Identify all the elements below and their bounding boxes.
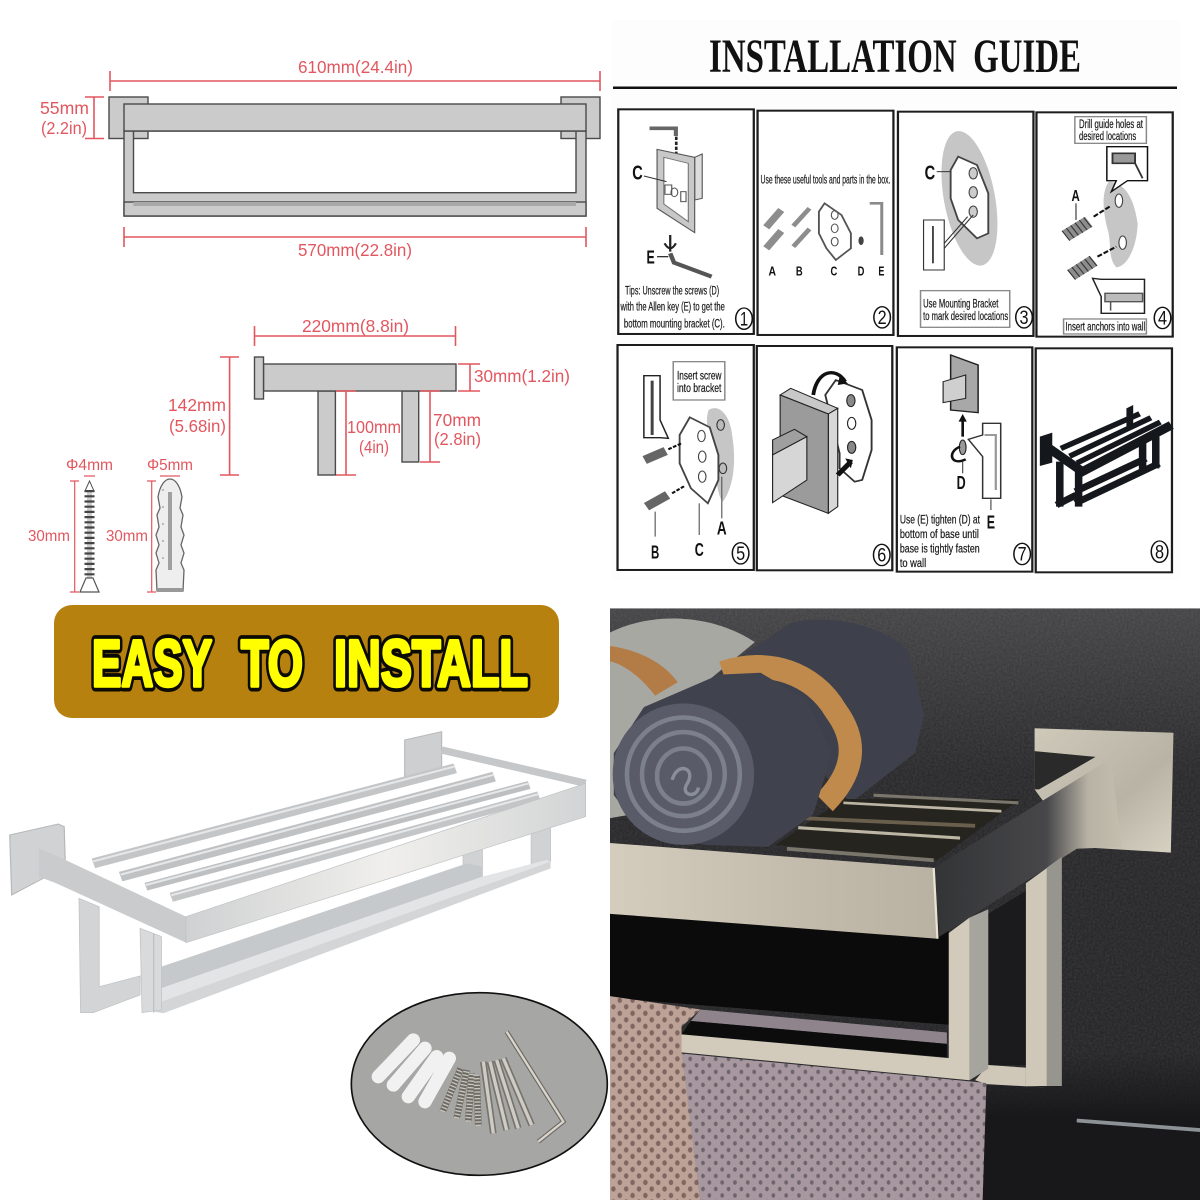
step 2: 2 [878, 307, 887, 329]
step 5: 5 [736, 543, 745, 565]
dimension: rear leg: 70mm [433, 410, 481, 430]
dark recess under shelf [610, 906, 949, 1025]
step 7: Use (E) tighten (D) at [900, 512, 980, 526]
step 6 [757, 346, 892, 570]
dimension: total height [168, 357, 239, 475]
step 1 [618, 109, 754, 334]
wall anchors [378, 1040, 449, 1102]
banner: easy to install: TO [241, 626, 303, 700]
step 5: into bracket [677, 381, 722, 395]
banner: easy to install [54, 605, 559, 718]
step 3: Use Mounting Bracket [923, 296, 999, 310]
dimension: depth [254, 316, 456, 346]
hanging towels [691, 1009, 947, 1044]
step 2: Use these useful tools and parts in the box. [761, 172, 890, 186]
shelf left side [39, 848, 186, 943]
dimension: plate height [40, 97, 104, 138]
anchor dimensions: Φ5mm [147, 457, 193, 474]
step 4: 4 [1158, 308, 1167, 329]
step 7 [897, 347, 1032, 572]
panel: front view dimensions [40, 57, 600, 260]
step 8: 8 [1155, 541, 1164, 563]
step 4 [1036, 112, 1173, 337]
step 1: C [632, 161, 643, 184]
rolled towel [613, 673, 832, 847]
step 3 [898, 112, 1033, 336]
step 7: bottom of base until [900, 527, 979, 541]
rear wall plate [405, 732, 442, 777]
front leg [140, 928, 161, 1013]
gold towel band [723, 667, 850, 803]
banner: easy to install: EASY [92, 626, 212, 700]
step 3: to mark desired locations [923, 309, 1008, 323]
dimension: total height: (5.68in) [169, 416, 226, 436]
step 3: 3 [1020, 307, 1029, 329]
left wall plate [10, 824, 65, 895]
step 1: Tips: Unscrew the screws (D) [625, 283, 719, 297]
dimension: overall width: 610mm(24.4in) [298, 57, 413, 77]
step 7: D [957, 473, 966, 494]
step 7: E [987, 512, 995, 533]
shelf opening [39, 750, 586, 917]
allen key [507, 1032, 563, 1142]
towel bar recess [682, 1021, 947, 1057]
guide steps row one [618, 109, 1173, 337]
anchor drawing [156, 479, 184, 592]
guide steps row two [618, 345, 1172, 572]
machine screws [483, 1058, 532, 1133]
step 2: C [831, 264, 837, 279]
step 1: bottom mounting bracket (C). [624, 316, 725, 330]
dimension: bar width [124, 227, 586, 260]
step 8 [1036, 348, 1172, 572]
black towel rack [1040, 405, 1167, 503]
step 5: Insert screw [677, 368, 722, 382]
screw dimensions: Φ4mm [66, 457, 113, 474]
panel: fastener dimensions [28, 457, 193, 592]
wood screws [443, 1068, 478, 1126]
banner: easy to install: INSTALL [334, 626, 528, 700]
step 1: 1 [740, 308, 748, 330]
product image: stainless towel rack [10, 732, 586, 1013]
shelf side arm [934, 759, 1122, 937]
shelf front face [186, 783, 586, 943]
dimension: front leg: (4in) [359, 437, 389, 457]
step 2: B [796, 264, 803, 279]
banner: easy to install: EASY [92, 626, 212, 700]
screw dimensions: 30mm [28, 528, 70, 545]
right rear legs [463, 824, 551, 887]
rear dark towel [740, 620, 924, 803]
screw drawing [80, 481, 99, 592]
wall plate [1035, 728, 1173, 853]
dimension: depth: 220mm(8.8in) [302, 316, 409, 336]
step 5: C [695, 540, 704, 561]
step 1: with the Allen key (E) to get the [620, 299, 725, 313]
left leg [79, 898, 140, 1013]
dimension: tube height [458, 364, 570, 391]
shelf rods [776, 799, 1020, 860]
top rods [442, 750, 586, 783]
anchor dimensions [106, 457, 193, 592]
step 7: base is tightly fasten [900, 541, 980, 555]
drawing: rack side view [254, 357, 456, 475]
step 5: A [717, 518, 727, 539]
step 7: 7 [1018, 544, 1027, 565]
step 5 [618, 345, 754, 570]
step 6: 6 [877, 545, 886, 566]
step 2: E [878, 264, 884, 279]
step 1: E [647, 247, 655, 268]
step 2 [758, 111, 893, 335]
step 4: Insert anchors into wall [1065, 319, 1145, 333]
lower towel bars [161, 863, 482, 988]
step 3: C [925, 161, 935, 184]
dimension: total height: 142mm [168, 395, 226, 415]
step 4: desired locations [1079, 129, 1136, 143]
shelf front face [610, 843, 937, 939]
step 2: A [768, 264, 776, 279]
dimension: tube height: 30mm(1.2in) [474, 366, 570, 386]
inset: included hardware [351, 993, 607, 1175]
step 7: to wall [900, 556, 926, 570]
dimension: overall width [110, 57, 600, 91]
dimension: bar width: 570mm(22.8in) [298, 240, 412, 260]
panel: installation guide [611, 20, 1181, 580]
banner: easy to install: TO [241, 626, 303, 700]
screw dimensions [28, 457, 113, 592]
rear leg [1026, 857, 1062, 1086]
drawing: rack front view [109, 97, 600, 216]
photo: towel rack on dark wall [610, 608, 1200, 1200]
grey towel [610, 619, 755, 818]
dimension: rear leg [420, 391, 481, 462]
dimension: rear leg: (2.8in) [434, 429, 481, 449]
dimension: front leg: 100mm [347, 417, 401, 437]
anchor dimensions: 30mm [106, 528, 148, 545]
dimension: plate height: (2.2in) [41, 118, 87, 138]
banner: easy to install: INSTALL [334, 626, 528, 700]
panel: side view dimensions [168, 316, 570, 475]
step 5: B [651, 542, 659, 563]
dimension: front leg [336, 391, 401, 475]
step 4: A [1071, 188, 1080, 205]
front leg and towel bar [682, 918, 969, 1080]
step 4: Drill guide holes at [1079, 117, 1143, 131]
dimension: plate height: 55mm [40, 98, 89, 118]
step 2: D [858, 264, 864, 279]
